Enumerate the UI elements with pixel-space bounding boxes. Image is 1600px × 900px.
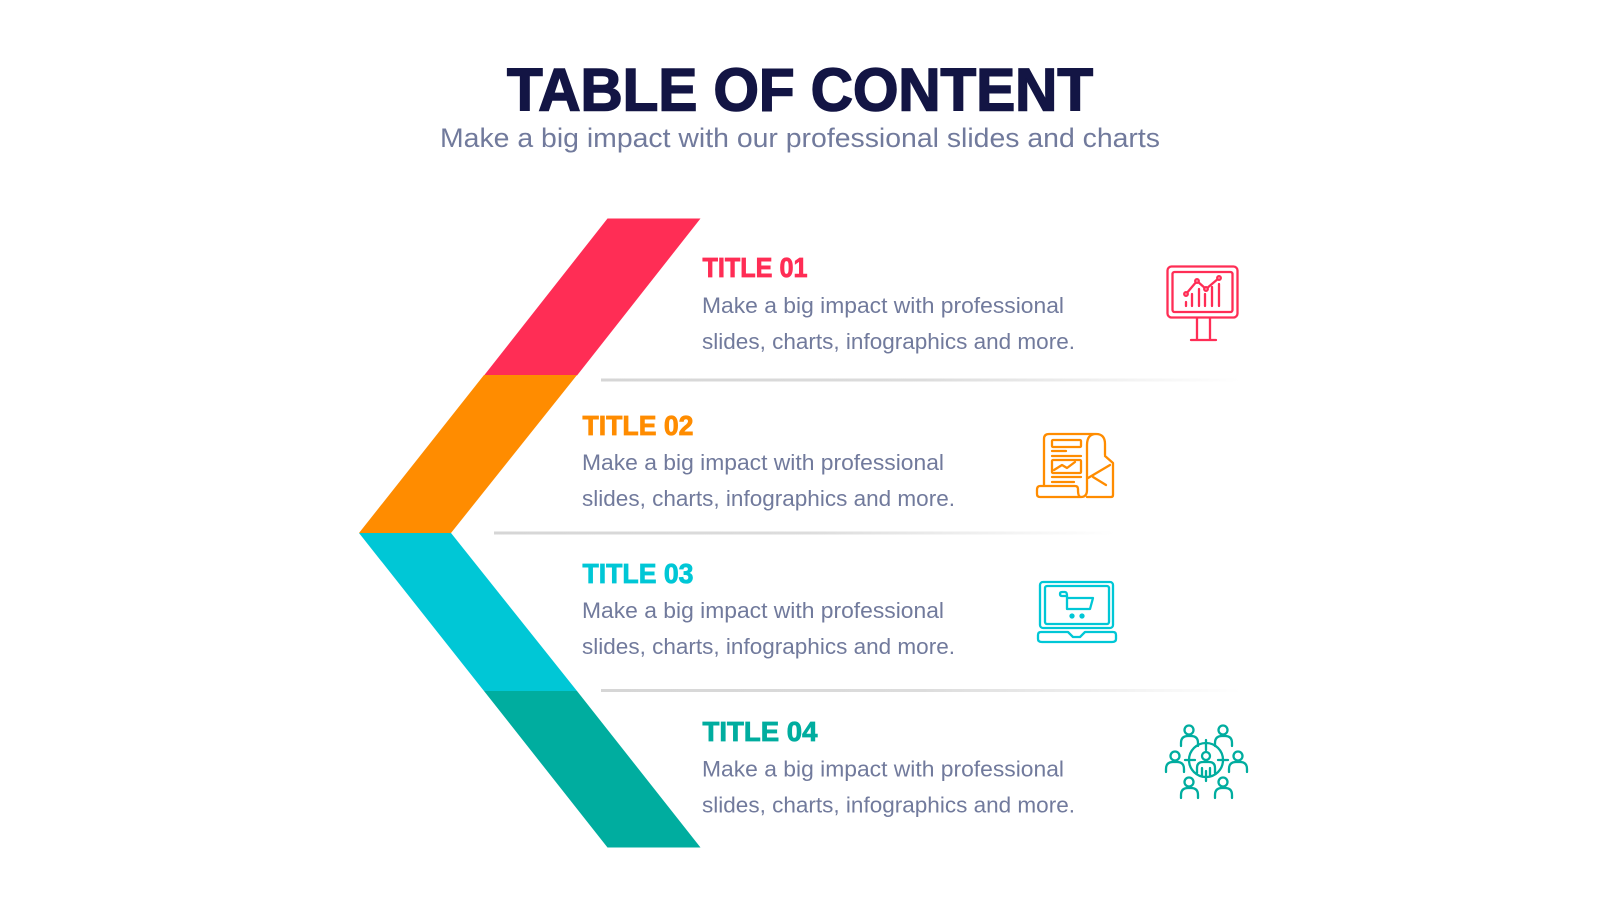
title: TABLE OF CONTENT [507, 56, 1093, 124]
text block: title 02 description: Make a big impact with professional [582, 450, 944, 475]
text block: title 01 description: slides, charts, infographics and more. [702, 329, 1075, 354]
icon: presentation monitor with chart [1168, 266, 1238, 340]
chevron segment 1 [484, 218, 700, 376]
text block: title 04 description: slides, charts, infographics and more. [702, 792, 1075, 818]
heading: title 03: TITLE 03 [582, 558, 694, 589]
heading: title 02: TITLE 02 [582, 410, 694, 441]
text block: title 03 description: slides, charts, infographics and more. [582, 634, 955, 659]
text block: title 01 description [702, 293, 1075, 354]
text block: title 03 description [582, 598, 955, 659]
chevron segment 3 [359, 533, 577, 691]
chevron arrow [359, 218, 700, 848]
icon: report scroll and envelope [1037, 434, 1113, 497]
text block: title 03 description: Make a big impact with professional [582, 598, 944, 623]
text block: title 02 description: slides, charts, infographics and more. [582, 486, 955, 511]
chevron segment 4 [484, 691, 700, 848]
panel: title 01 [702, 252, 1238, 354]
subtitle: Make a big impact with our professional slides and charts [440, 123, 1160, 153]
icon: audience target [1166, 726, 1247, 798]
panel: title 04 [702, 716, 1247, 818]
heading: title 01: TITLE 01 [702, 252, 808, 283]
text block: title 04 description [702, 756, 1075, 818]
icon: laptop with shopping cart [1038, 582, 1116, 642]
chevron segment 2 [359, 375, 577, 533]
text block: title 02 description [582, 450, 955, 511]
text block: title 01 description: Make a big impact with professional [702, 293, 1064, 318]
panel: title 02 [582, 410, 1113, 511]
text block: title 04 description: Make a big impact with professional [702, 756, 1064, 782]
panel: title 03 [582, 558, 1116, 659]
heading: title 04: TITLE 04 [702, 716, 818, 747]
